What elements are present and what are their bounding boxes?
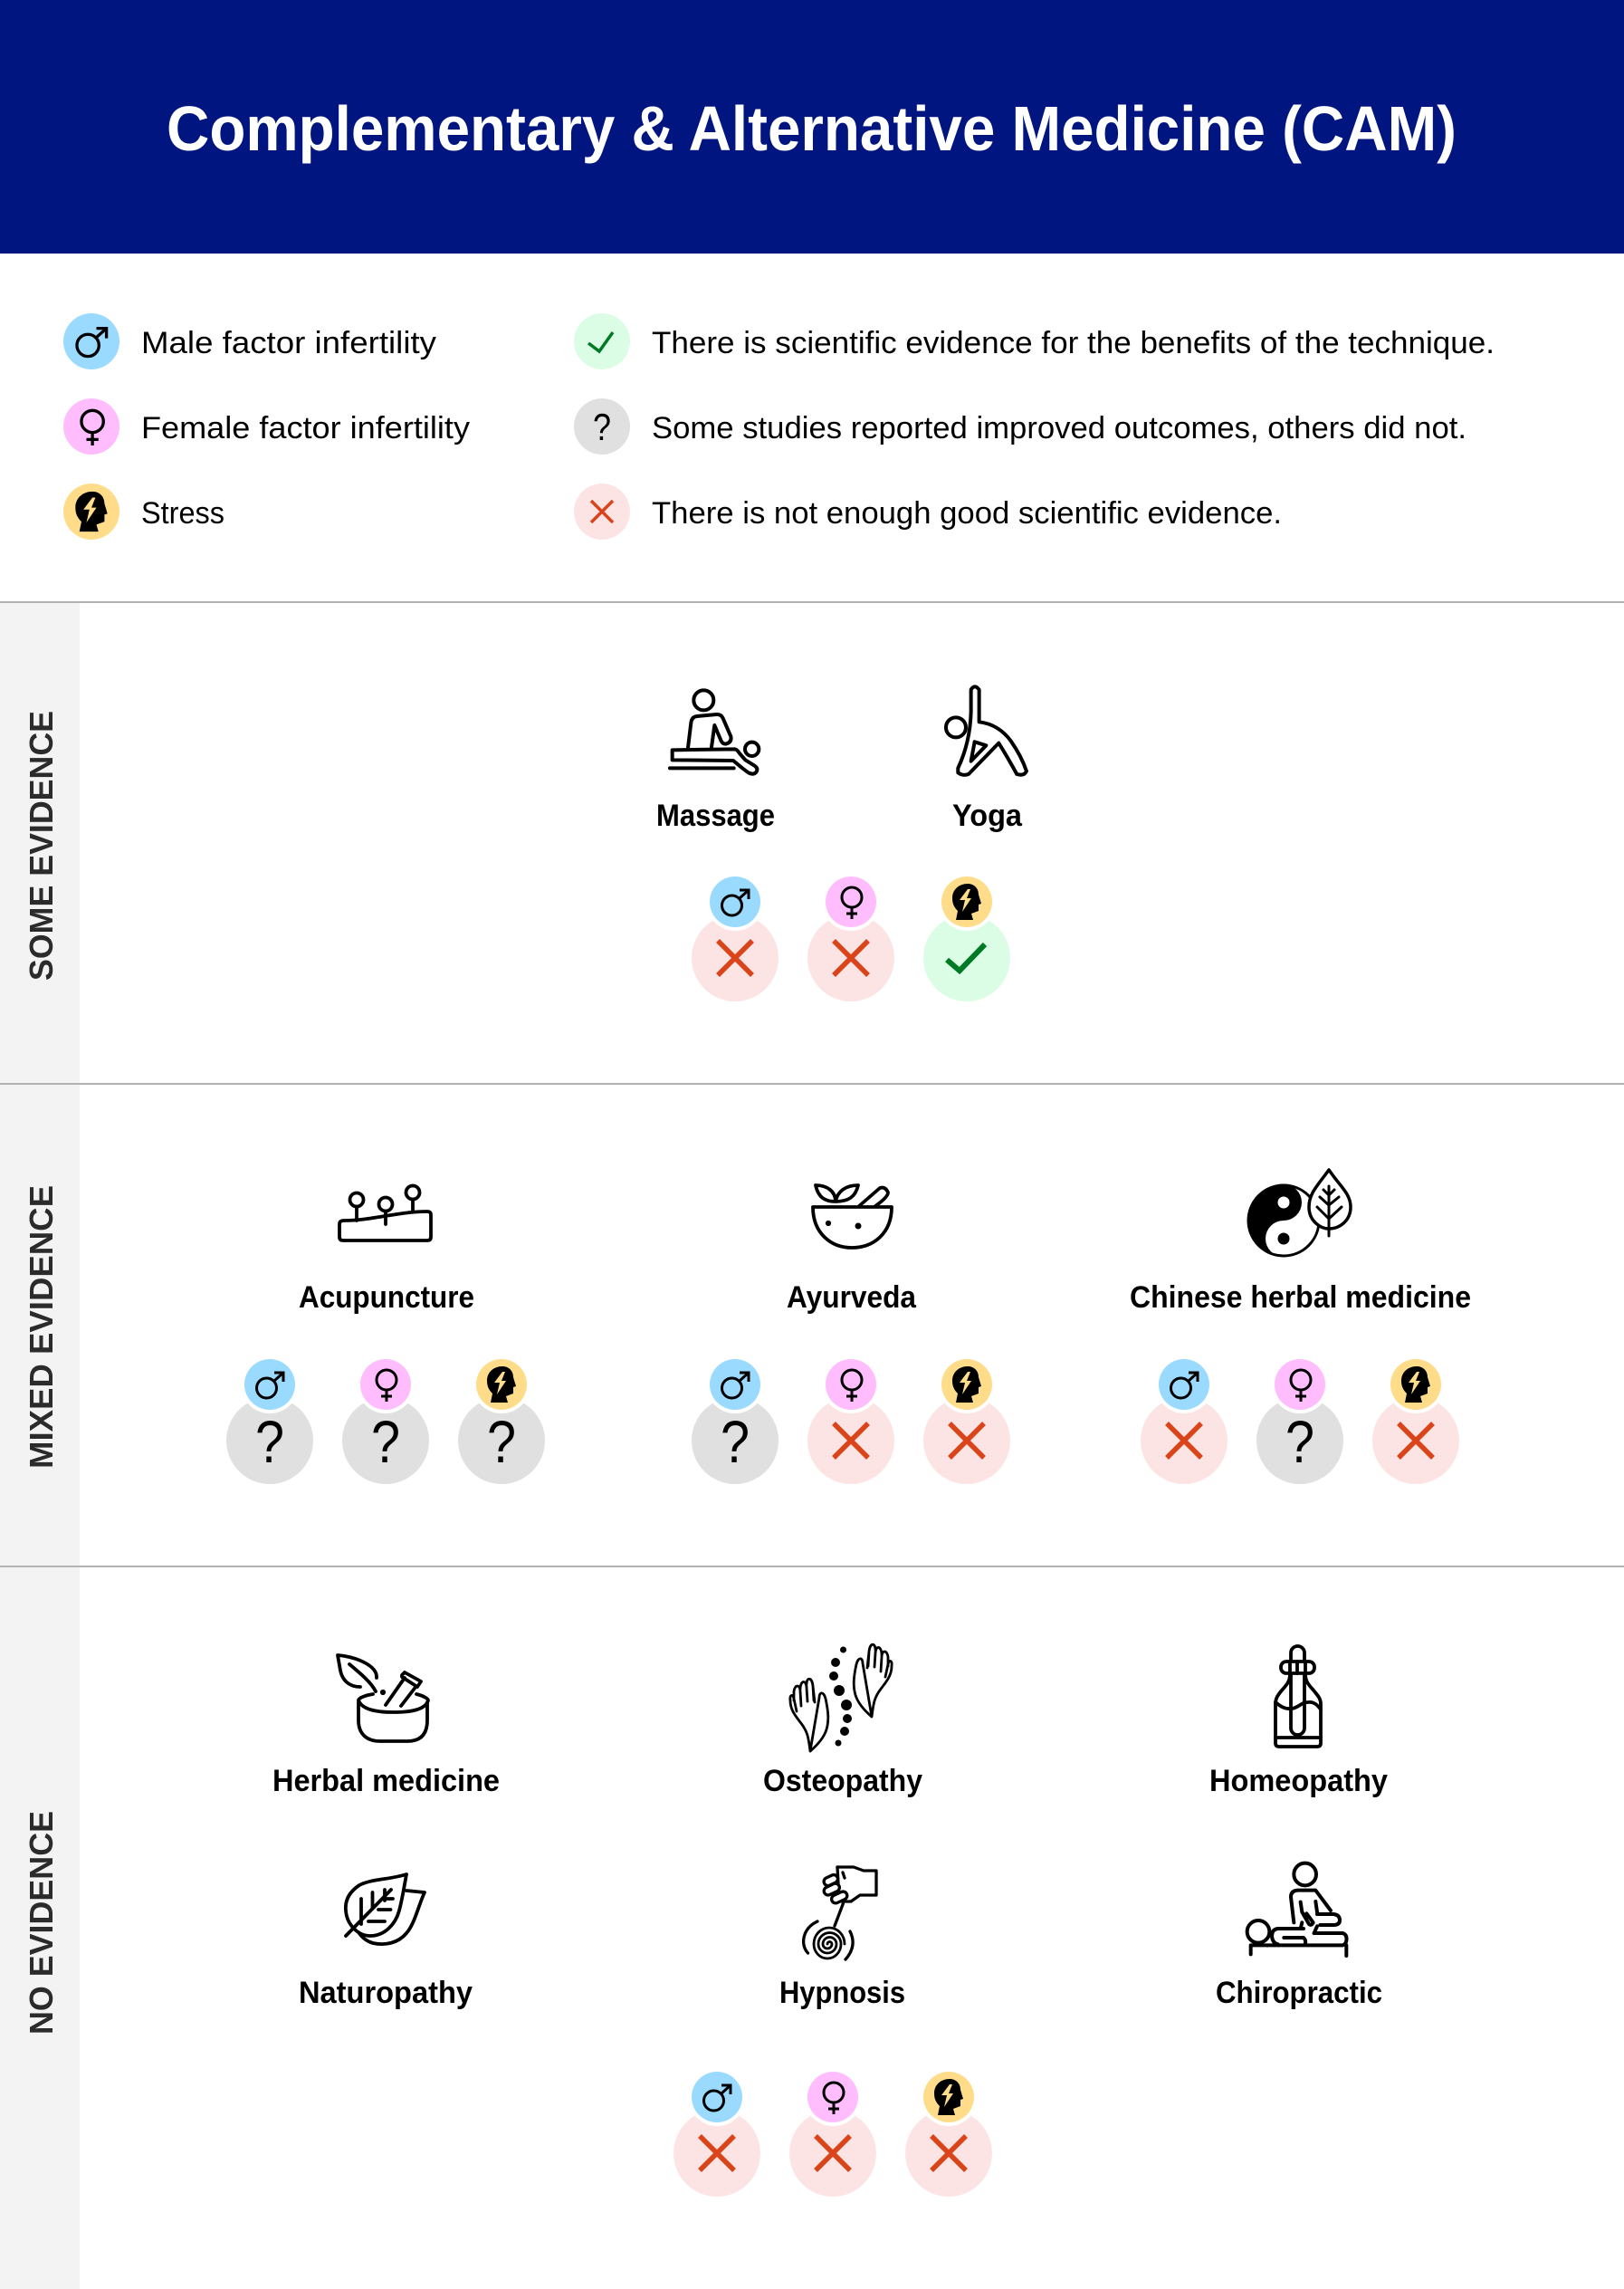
section label: no evidence: NO EVIDENCE — [23, 1811, 60, 2035]
sidebar background — [0, 602, 80, 2289]
legend text: mixed evidence: Some studies reported improved outcomes, others did not. — [652, 411, 1466, 445]
legend icon: stress — [63, 484, 119, 540]
label: homeopathy: Homeopathy — [1209, 1764, 1388, 1798]
marker: female, not enough — [789, 2068, 876, 2197]
marker: acupuncture stress, mixed: ? — [487, 1408, 516, 1475]
label: chinese herbal medicine: Chinese herbal medicine — [1130, 1280, 1471, 1315]
label: naturopathy: Naturopathy — [299, 1976, 473, 2010]
marker: ayurveda female, not enough — [807, 1355, 894, 1484]
label: ayurveda: Ayurveda — [787, 1280, 917, 1315]
icon: ayurveda — [813, 1185, 892, 1248]
marker: stress, evidence — [923, 873, 1010, 1001]
marker: chinese herbal stress, not enough — [1372, 1355, 1459, 1484]
legend text: no evidence: There is not enough good scientific evidence. — [652, 496, 1282, 531]
legend text: stress: Stress — [141, 496, 224, 531]
header band — [0, 0, 1624, 254]
marker: acupuncture male, mixed: ? — [255, 1408, 284, 1475]
marker: male, not enough evidence — [692, 873, 779, 1001]
marker: stress, not enough — [905, 2068, 992, 2197]
icon: hypnosis — [804, 1867, 876, 1959]
legend text: female: Female factor infertility — [141, 411, 470, 445]
label: massage: Massage — [656, 799, 775, 833]
marker: acupuncture male, mixed — [226, 1355, 313, 1484]
marker: ayurveda male, mixed: ? — [721, 1408, 750, 1475]
label: osteopathy: Osteopathy — [763, 1764, 922, 1798]
legend icon: male — [63, 313, 119, 369]
marker: acupuncture female, mixed — [342, 1355, 429, 1484]
icon: herbal medicine — [338, 1655, 428, 1741]
icon: osteopathy — [790, 1644, 892, 1751]
marker: male, not enough — [673, 2068, 760, 2197]
icon: massage — [670, 690, 759, 774]
icon: naturopathy — [346, 1874, 425, 1944]
panel: some evidence — [656, 686, 1027, 1001]
icon: chiropractic — [1247, 1863, 1346, 1956]
section label: mixed evidence: MIXED EVIDENCE — [23, 1185, 60, 1469]
legend icon: check — [574, 313, 630, 369]
section label: some evidence: SOME EVIDENCE — [23, 711, 60, 981]
label: hypnosis: Hypnosis — [779, 1976, 905, 2010]
marker: chinese herbal male, not enough — [1141, 1355, 1228, 1484]
marker: female, not enough evidence — [807, 873, 894, 1001]
icon: acupuncture — [339, 1186, 431, 1240]
marker: chinese herbal female, mixed: ? — [1285, 1408, 1314, 1475]
title: Complementary & Alternative Medicine (CAM) — [167, 93, 1457, 164]
label: chiropractic: Chiropractic — [1216, 1976, 1382, 2010]
legend text: male: Male factor infertility — [141, 326, 436, 360]
label: acupuncture: Acupuncture — [299, 1280, 474, 1315]
panel: legend — [63, 313, 1495, 540]
marker: ayurveda stress, not enough — [923, 1355, 1010, 1484]
legend text: scientific evidence: There is scientific evidence for the benefits of the technique. — [652, 326, 1495, 360]
marker: chinese herbal female, mixed — [1256, 1355, 1343, 1484]
label: yoga: Yoga — [952, 799, 1023, 833]
icon: chinese herbal medicine — [1247, 1170, 1351, 1257]
legend icon: question: ? — [593, 406, 611, 448]
legend icon: female — [63, 398, 119, 455]
label: herbal medicine: Herbal medicine — [272, 1764, 500, 1798]
icon: homeopathy — [1275, 1646, 1321, 1747]
panel: no evidence — [272, 1644, 1388, 2197]
legend icon: cross — [574, 484, 630, 540]
marker: ayurveda male, mixed — [692, 1355, 779, 1484]
marker: acupuncture stress, mixed — [458, 1355, 545, 1484]
marker: acupuncture female, mixed: ? — [371, 1408, 400, 1475]
legend icon: question — [574, 398, 630, 455]
icon: yoga — [946, 686, 1027, 775]
panel: mixed evidence — [226, 1170, 1471, 1484]
